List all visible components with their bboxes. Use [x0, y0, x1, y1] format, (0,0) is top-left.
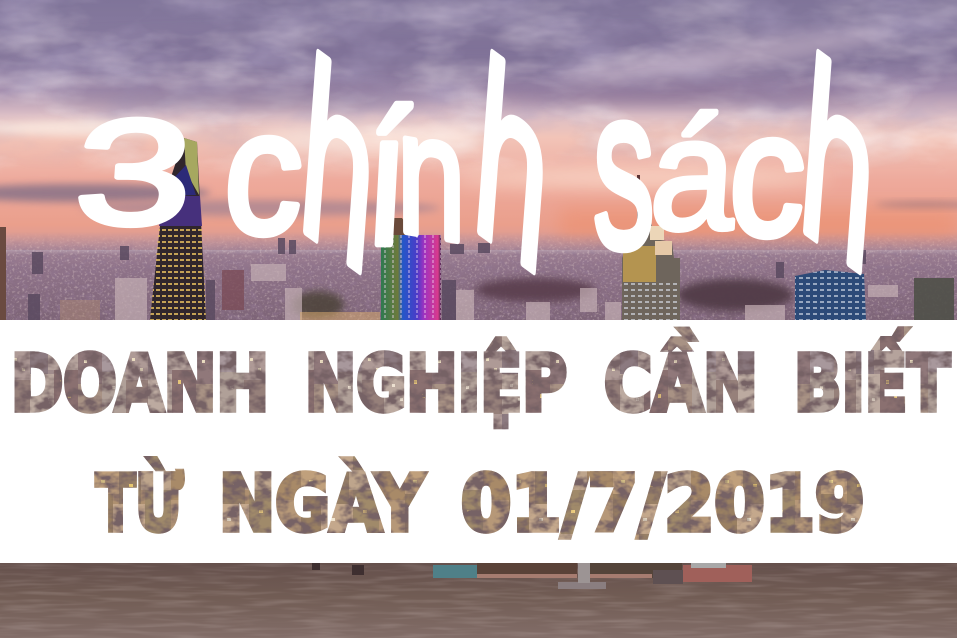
heading: 3 chính sách: h	[792, 3, 885, 331]
heading line 1: DOANH NGHIỆP CẦN BIẾT: DOANH	[11, 340, 269, 429]
heading: 3 chính sách: í	[361, 73, 414, 285]
blue office tower	[795, 270, 866, 320]
heading: 3 chính sách: s	[593, 40, 655, 297]
heading: 3 chính sách: á	[646, 86, 740, 264]
photo background: city skyline	[0, 138, 957, 322]
photo background: river and bank	[0, 562, 957, 638]
heading: 3 chính sách: 3	[70, 88, 198, 256]
right-side low buildings	[914, 278, 954, 320]
heading line 2: TỪ NGÀY 01/7/2019: TỪ	[96, 459, 183, 549]
white title band	[0, 320, 957, 563]
heading: 3 chính sách: h	[292, 3, 385, 331]
heading line 1: DOANH NGHIỆP CẦN BIẾT: NGHIỆP	[305, 338, 567, 429]
heading line 1: DOANH NGHIỆP CẦN BIẾT	[11, 329, 950, 429]
Vietcombank tower	[622, 175, 680, 320]
heading: 3 chính sách: c	[725, 76, 810, 273]
heading line 2: TỪ NGÀY 01/7/2019: 01/7/2019	[461, 460, 865, 549]
left edge tower	[0, 227, 6, 320]
heading line 1: DOANH NGHIỆP CẦN BIẾT: CẦN	[604, 329, 758, 429]
heading: 3 chính sách	[70, 3, 885, 331]
heading: 3 chính sách: h	[466, 3, 559, 331]
heading line 2: TỪ NGÀY 01/7/2019	[96, 459, 865, 549]
Bitexco tower	[150, 138, 206, 320]
heading: 3 chính sách: n	[397, 72, 465, 280]
heading: 3 chính sách: c	[220, 75, 308, 271]
heading line 2: TỪ NGÀY 01/7/2019: NGÀY	[219, 459, 425, 549]
rainbow tower	[381, 218, 441, 320]
photo background: sunset sky	[0, 0, 957, 250]
